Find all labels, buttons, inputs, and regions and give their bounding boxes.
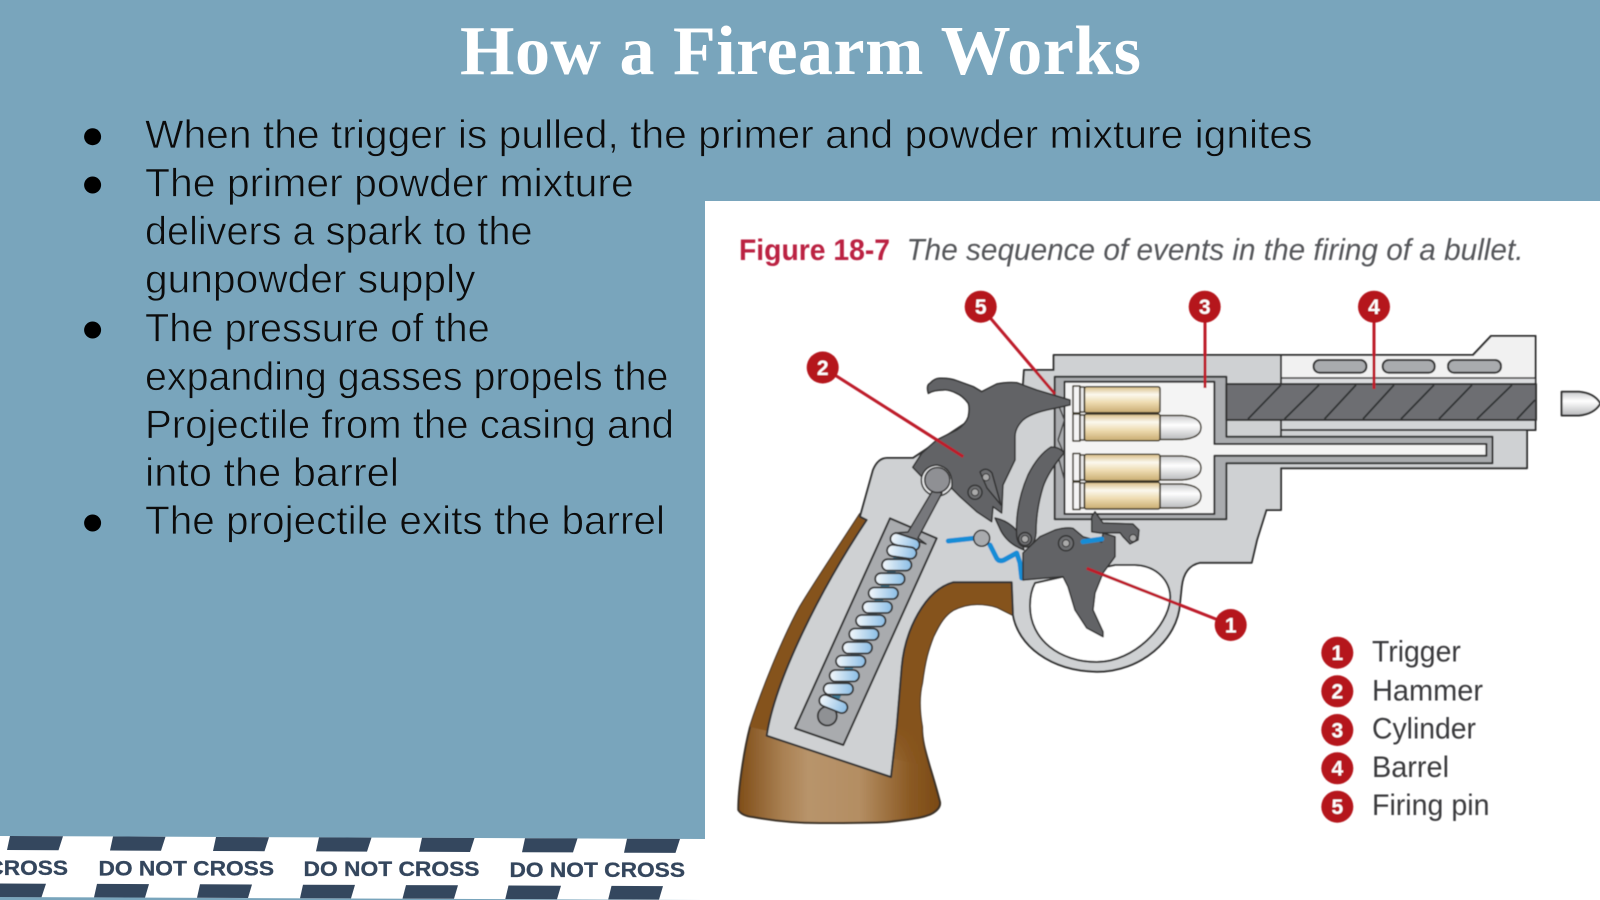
bullet list [84, 113, 1313, 543]
callout 2: hammer: 2 [817, 357, 829, 380]
cartridges [1058, 386, 1201, 510]
tape stripes [0, 836, 680, 900]
bullet: expanding gasses: Projectile from the casing and [145, 403, 674, 447]
panel: figure 18-7 [705, 201, 1600, 900]
tape text: DO NOT CROSS [304, 857, 480, 881]
callout 5: firing pin: 5 [975, 296, 987, 319]
tape text: DO NOT CROSS [98, 856, 274, 880]
hand link [995, 447, 1064, 550]
bullet: expanding gasses [84, 307, 674, 495]
cartridge row 3 [1073, 454, 1201, 481]
mainspring strut [895, 464, 953, 544]
legend: trigger [1321, 636, 1461, 669]
callout 2: hammer [807, 352, 963, 457]
hammer [913, 378, 1070, 522]
trigger guard opening [1030, 565, 1170, 662]
cartridge row 1 [1073, 386, 1160, 413]
barrel with rifling [1226, 384, 1536, 420]
cylinder release [1092, 512, 1139, 544]
cylinder window [1064, 382, 1486, 514]
legend [1321, 636, 1490, 823]
legend: cylinder [1321, 712, 1476, 746]
legend: trigger: 1 [1331, 642, 1343, 665]
legend: cylinder: 3 [1331, 719, 1343, 742]
legend: trigger: Trigger [1372, 636, 1461, 669]
bullet: expanding gasses: expanding gasses propels the [145, 355, 668, 399]
callout 3: cylinder: 3 [1199, 296, 1211, 319]
legend: firing pin: 5 [1331, 796, 1343, 819]
bullet: expanding gasses: The pressure of the [145, 307, 490, 351]
revolver diagram [738, 336, 1600, 823]
wooden grip [738, 514, 1013, 823]
callout 5: firing pin [965, 291, 1055, 394]
cylinder housing [1055, 377, 1492, 519]
gun frame [767, 336, 1536, 777]
cartridge row 2 [1073, 414, 1201, 441]
bullet: trigger ignites mixture: When the trigger is pulled, the primer and powder mixture ignites [145, 113, 1312, 157]
bullet: spark to gunpowder: The primer powder mixture [145, 162, 634, 206]
mainspring coil [818, 532, 921, 726]
legend: firing pin [1321, 789, 1490, 823]
legend: barrel: Barrel [1372, 751, 1449, 784]
bullet: spark to gunpowder: gunpowder supply [145, 258, 476, 302]
figure caption: The sequence of events in the firing of a bullet. [906, 232, 1524, 267]
legend: cylinder: Cylinder [1372, 712, 1476, 746]
bullet: expanding gasses: into the barrel [145, 451, 399, 495]
callout 4: barrel: 4 [1368, 296, 1380, 319]
legend: firing pin: Firing pin [1372, 789, 1490, 822]
police tape [0, 836, 705, 900]
trigger [1018, 528, 1136, 637]
bullet: spark to gunpowder [84, 162, 634, 302]
callout 1: trigger [1087, 568, 1247, 641]
bullet: spark to gunpowder: delivers a spark to the [145, 210, 533, 254]
trigger return spring [948, 530, 1022, 578]
title: How a Firearm Works [460, 13, 1141, 90]
barrel shroud with vents [1281, 336, 1536, 437]
legend: hammer: Hammer [1372, 674, 1483, 708]
magazine well [795, 518, 937, 745]
tape text [0, 856, 685, 882]
tape text: DO NOT CROSS [510, 858, 685, 882]
callout 4: barrel [1358, 291, 1390, 389]
legend: hammer: 2 [1331, 681, 1343, 704]
legend: barrel: 4 [1331, 758, 1343, 781]
ejected bullet [1562, 392, 1600, 416]
legend: hammer [1321, 674, 1483, 708]
callout 1: trigger: 1 [1225, 614, 1237, 638]
legend: barrel [1321, 751, 1449, 784]
callout 3: cylinder [1189, 291, 1221, 388]
figure caption: Figure 18-7 [739, 234, 890, 267]
bullet: projectile exits: The projectile exits the barrel [145, 499, 665, 543]
cartridge row 4 [1073, 482, 1201, 510]
